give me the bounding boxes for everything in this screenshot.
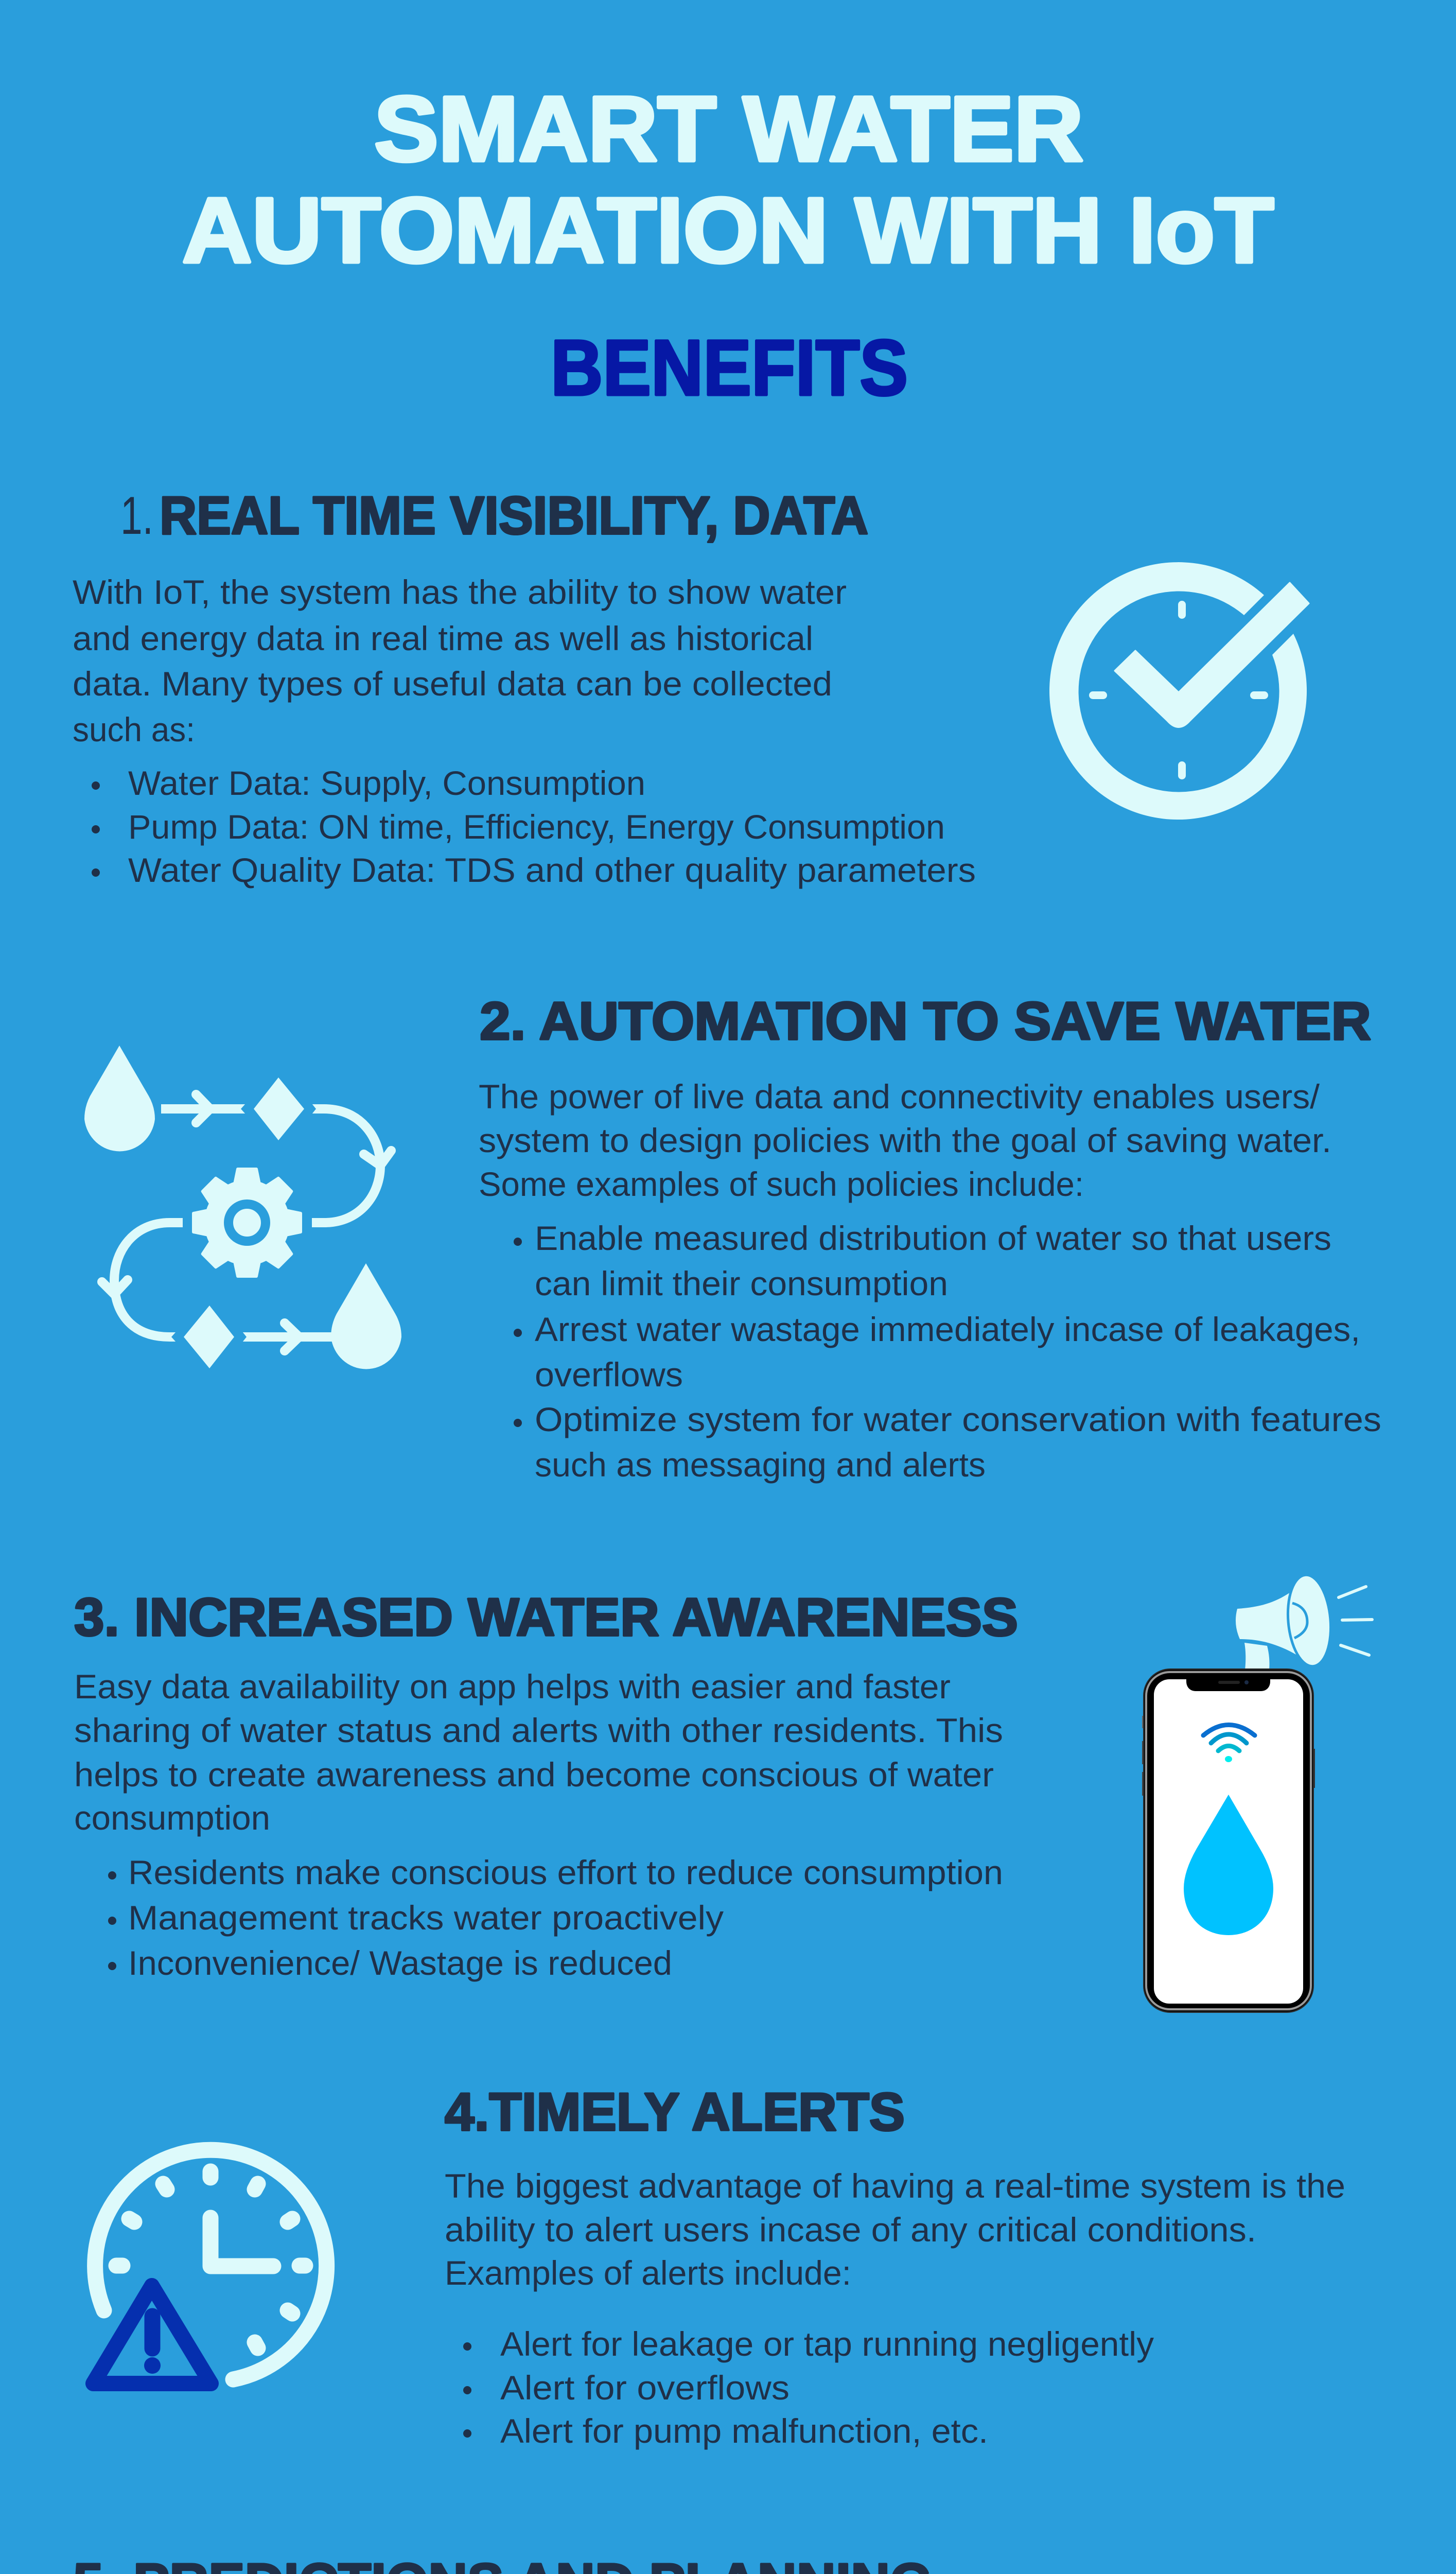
subtitle: benefits: BENEFITS — [551, 324, 908, 412]
bullet list 2: overflows — [535, 1355, 683, 1394]
icon: upper diamond — [254, 1077, 304, 1140]
body text 4: ability to alert users incase of any critical conditions. — [445, 2211, 1256, 2249]
panel: automation to save water — [84, 992, 1381, 1484]
body text 3 — [74, 1667, 1003, 1837]
heading 2: 2. AUTOMATION TO SAVE WATER — [480, 992, 1371, 1051]
phone body — [1142, 1669, 1315, 2012]
bullet list 2: Enable measured distribution of water so that users — [535, 1219, 1331, 1257]
body text 1: and energy data in real time as well as historical — [73, 619, 813, 657]
bullet list 1 — [92, 764, 976, 889]
icon: clock with check mark — [1049, 562, 1309, 820]
icon: smartphone with water app — [1142, 1669, 1315, 2012]
clock — [95, 2150, 327, 2379]
bullet list 2: Optimize system for water conservation with features — [535, 1400, 1381, 1438]
body text 3: sharing of water status and alerts with other residents. This — [74, 1711, 1003, 1749]
bullet list 1: Water Quality Data: TDS and other quality parameters — [128, 851, 976, 889]
arrow: diamond to drop — [242, 1323, 335, 1351]
icon: megaphone — [1236, 1573, 1372, 1670]
bullet list 3: Management tracks water proactively — [128, 1899, 724, 1937]
body text 4 — [445, 2167, 1345, 2292]
bullet list 1: Pump Data: ON time, Efficiency, Energy Consumption — [128, 808, 945, 846]
icon: lower diamond — [184, 1306, 234, 1368]
body text 4: The biggest advantage of having a real-time system is the — [445, 2167, 1345, 2205]
body text 1 — [73, 573, 847, 749]
icon: gear — [194, 1169, 301, 1276]
body text 3: Easy data availability on app helps with easier and faster — [74, 1667, 951, 1706]
title — [182, 77, 1274, 282]
icon: wifi — [1203, 1725, 1255, 1762]
body text 1: such as: — [73, 710, 195, 749]
bullet list 2: Arrest water wastage immediately incase of leakages, — [535, 1310, 1360, 1348]
bullet list 4: Alert for pump malfunction, etc. — [500, 2412, 988, 2450]
arrow: left curve — [102, 1223, 183, 1342]
arrow: drop to diamond — [161, 1094, 245, 1123]
body text 2: The power of live data and connectivity enables users/ — [479, 1077, 1320, 1116]
title: AUTOMATION WITH IoT — [182, 179, 1274, 282]
heading 4: 4.TIMELY ALERTS — [445, 2082, 905, 2142]
bullet list 4: Alert for overflows — [500, 2369, 790, 2407]
bullet list 2 — [514, 1219, 1381, 1484]
panel: real time visibility — [73, 486, 1309, 889]
icon: output drop — [331, 1263, 401, 1369]
icon: clock with warning — [93, 2150, 327, 2384]
panel: increased water awareness — [74, 1573, 1372, 2012]
arrow: right curve — [312, 1104, 391, 1223]
body text 1: With IoT, the system has the ability to show water — [73, 573, 847, 611]
body text 2 — [479, 1077, 1331, 1203]
bullet list 2: such as messaging and alerts — [535, 1446, 986, 1484]
heading 1: 1. — [120, 486, 153, 546]
bullet list 4: Alert for leakage or tap running negligently — [500, 2325, 1154, 2363]
body text 3: consumption — [74, 1799, 270, 1837]
icon: water process flow with gear — [84, 1046, 401, 1369]
heading 1: REAL TIME VISIBILITY, DATA — [160, 486, 868, 546]
panel: timely alerts — [93, 2082, 1345, 2450]
bullet list 3 — [108, 1853, 1003, 1982]
body text 3: helps to create awareness and become conscious of water — [74, 1755, 994, 1794]
title: SMART WATER — [374, 77, 1083, 180]
icon: app water drop — [1184, 1795, 1273, 1935]
heading 3: 3. INCREASED WATER AWARENESS — [74, 1588, 1018, 1647]
bullet list 3: Residents make conscious effort to reduce consumption — [128, 1853, 1003, 1891]
body text 2: Some examples of such policies include: — [479, 1165, 1084, 1203]
body text 4: Examples of alerts include: — [445, 2254, 851, 2292]
body text 1: data. Many types of useful data can be collected — [73, 665, 832, 703]
bullet list 3: Inconvenience/ Wastage is reduced — [128, 1944, 672, 1982]
bullet list 4 — [463, 2325, 1154, 2450]
body text 2: system to design policies with the goal of saving water. — [479, 1121, 1331, 1159]
warning triangle — [93, 2286, 211, 2384]
icon: source drop — [84, 1046, 155, 1151]
bullet list 1: Water Data: Supply, Consumption — [128, 764, 645, 802]
bullet list 2: can limit their consumption — [535, 1264, 948, 1302]
